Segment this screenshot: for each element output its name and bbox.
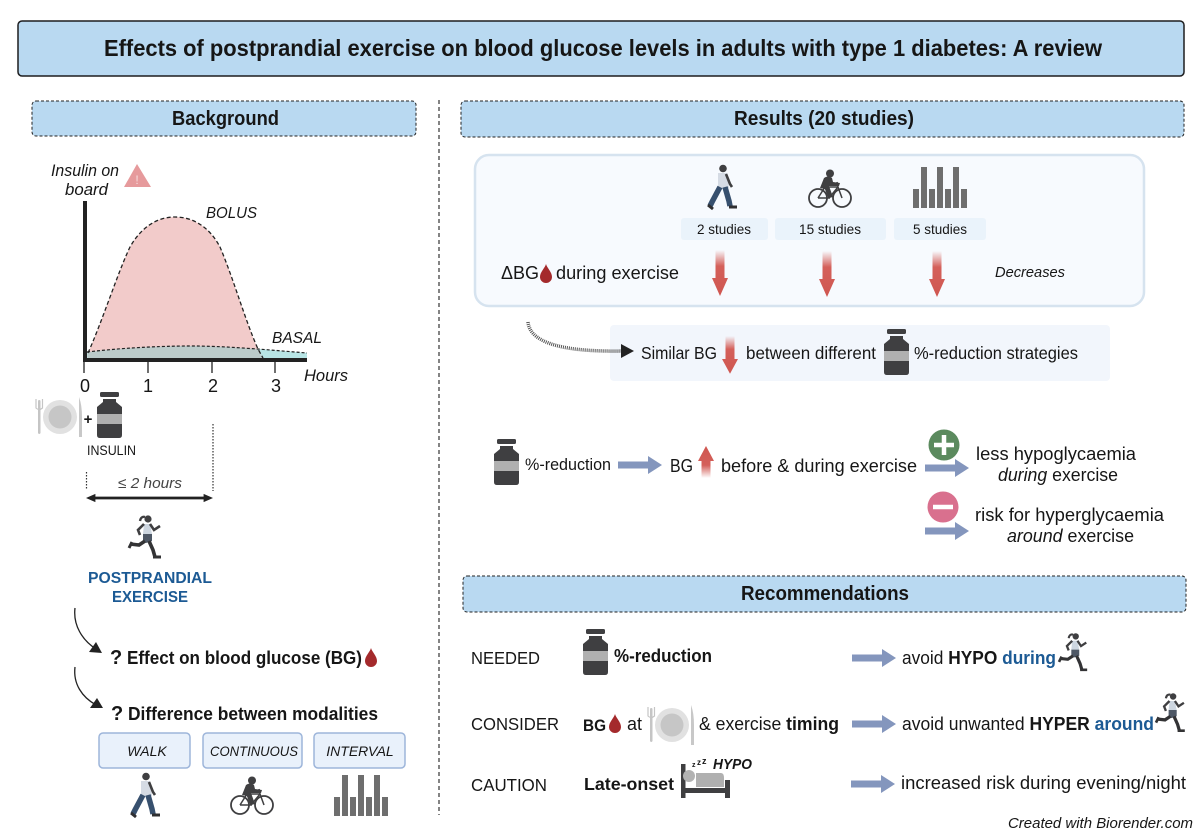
interval column: 5 studies: [913, 221, 967, 237]
icon: runner: [129, 515, 161, 557]
heading: results: [461, 101, 1184, 137]
recommendation: caution: Late-onset: [584, 774, 674, 794]
label: insulin: INSULIN: [87, 443, 136, 458]
recommendation: needed: [471, 629, 1087, 675]
recommendation: needed: avoid HYPO during: [902, 648, 1056, 668]
question: difference between modalities: ?: [111, 703, 123, 725]
outcome: risk for hyperglycaemia: risk for hyperglycaemia: [975, 505, 1165, 525]
double arrow: [87, 494, 212, 502]
recommendation: consider: & exercise timing: [699, 714, 839, 734]
recommendation: needed: %-reduction: [614, 646, 712, 666]
tick labels: 2: [208, 376, 218, 396]
recommendation: consider: BG: [583, 716, 606, 735]
basal outline: [87, 346, 307, 353]
curved arrow 1: [75, 608, 102, 653]
arrow: dotted curve: [528, 322, 634, 358]
meal plus insulin: [36, 392, 136, 458]
bolus outline: [88, 217, 263, 358]
arrow: BG up: [698, 446, 714, 478]
label: postprandial exercise: [88, 570, 212, 606]
modality: walk: WALK: [127, 743, 167, 759]
question: difference between modalities: Difference between modalities: [128, 703, 378, 724]
walk column: [681, 165, 768, 296]
continuous column: 15 studies: [799, 221, 861, 237]
outcome: less hypoglycaemia: during exercise: [998, 465, 1118, 485]
title banner: [18, 21, 1184, 76]
recommendation: consider: CONSIDER: [471, 714, 559, 734]
row label: delta BG: [501, 262, 679, 283]
axis label: insulin on board: board: [65, 180, 109, 199]
icon: bed: z: [702, 756, 707, 766]
outcome: risk for hyperglycaemia: around exercise: [1007, 526, 1134, 546]
tick labels: 3: [271, 376, 281, 396]
basal tail: [259, 349, 307, 358]
ticks: [84, 362, 275, 373]
plus sign: +: [84, 411, 93, 428]
label: postprandial exercise: POSTPRANDIAL: [88, 570, 212, 587]
recommendation: consider: [471, 693, 1185, 745]
recommendation: caution: HYPO: [713, 757, 753, 773]
label: bolus: BOLUS: [206, 205, 257, 222]
panel: similar BG: between different: [746, 343, 876, 363]
recommendation: caution: CAUTION: [471, 775, 547, 795]
heading: background: [32, 101, 416, 136]
question: effect on BG: Effect on blood glucose (BG): [127, 647, 362, 668]
icon: bed: z: [692, 762, 696, 769]
heading: background: Background: [172, 108, 279, 130]
axis label: insulin on board: Insulin on: [51, 161, 119, 180]
title banner: Effects of postprandial exercise on blood glucose levels in adults with type 1 diabetes: A review: [104, 35, 1102, 61]
heading: results: Results (20 studies): [734, 108, 914, 130]
icon: warning triangle: [124, 164, 151, 187]
modality: interval: [314, 733, 405, 816]
label: postprandial exercise: EXERCISE: [112, 589, 188, 606]
row label: delta BG: ΔBG: [501, 262, 539, 283]
label: decreases: Decreases: [995, 264, 1065, 281]
icon: bed: z: [697, 758, 701, 767]
outcome: less hypoglycaemia: less hypoglycaemia: [976, 444, 1137, 464]
walk column: 2 studies: [697, 221, 751, 237]
row label: delta BG: during exercise: [556, 262, 679, 283]
recommendation: caution: increased risk during evening/night: [901, 773, 1186, 793]
heading: recommendations: [463, 576, 1186, 612]
heading: recommendations: Recommendations: [741, 583, 909, 605]
flow: reduction to BG rise: %-reduction: [525, 455, 611, 474]
tick labels: 1: [143, 376, 153, 396]
modality: interval: INTERVAL: [326, 743, 394, 759]
tick labels: [80, 376, 281, 396]
recommendation: needed: NEEDED: [471, 648, 540, 668]
question: effect on BG: ?: [110, 647, 122, 669]
axes: [83, 201, 307, 362]
axis label: insulin on board: [51, 161, 119, 199]
label: two hours: ≤ 2 hours: [118, 475, 183, 492]
curved arrow 2: [75, 667, 103, 708]
flow: reduction to BG rise: [494, 439, 917, 485]
recommendation: consider: at: [627, 714, 642, 734]
interval column: [894, 167, 986, 297]
icon: insulin bottle: [97, 392, 122, 438]
tick labels: 0: [80, 376, 90, 396]
label: basal: BASAL: [272, 330, 322, 347]
bolus curve: [88, 217, 262, 358]
credit: Created with Biorender.com: [1008, 815, 1193, 832]
flow: reduction to BG rise: BG: [670, 456, 693, 476]
chart: insulin on board: [51, 161, 348, 396]
outcome: risk for hyperglycaemia: [925, 492, 1165, 546]
icon: warning triangle: !: [135, 173, 139, 187]
panel: background: [32, 101, 416, 817]
icon: plate: [36, 397, 82, 437]
outcome: less hypoglycaemia: [925, 430, 1137, 485]
panel: results by modality: [475, 155, 1144, 306]
icon: bed: [681, 756, 730, 798]
flow: reduction to BG rise: before & during exercise: [721, 456, 917, 476]
modality: continuous: CONTINUOUS: [210, 743, 299, 759]
continuous column: [775, 170, 886, 297]
basal area: [87, 346, 307, 358]
timing window: [86, 424, 213, 502]
panel: similar BG: [610, 325, 1110, 381]
panel: similar BG: %-reduction strategies: [914, 343, 1078, 363]
recommendation: caution: [471, 756, 1186, 798]
modality: walk: [99, 733, 190, 817]
panel: similar BG: Similar BG: [641, 343, 717, 363]
modality: continuous: [203, 733, 302, 814]
recommendation: consider: avoid unwanted HYPER around: [902, 714, 1154, 734]
label: hours: Hours: [304, 366, 348, 385]
